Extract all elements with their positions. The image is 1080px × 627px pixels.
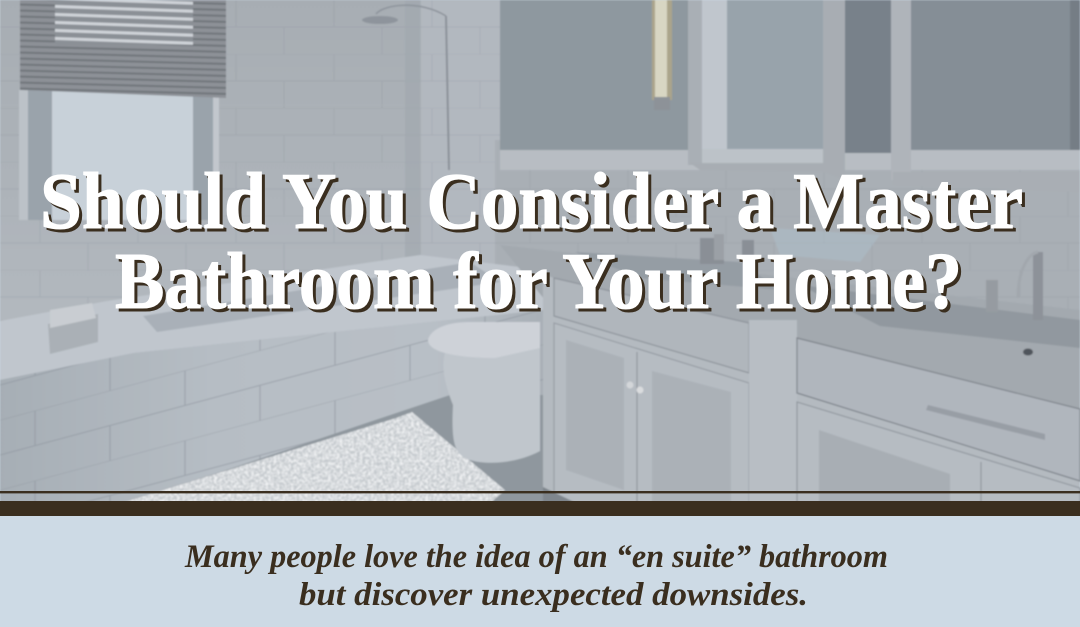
title (40, 158, 1026, 329)
roller blinds (20, 0, 226, 98)
towel basket (48, 303, 98, 354)
title text: Bathroom for Your Home? (115, 238, 962, 326)
subtitle text (184, 539, 888, 613)
wall sconce (652, 0, 672, 110)
basin plug (1023, 348, 1033, 356)
subtitle panel (0, 516, 1080, 627)
tub side bricks (0, 310, 545, 517)
back wall tiles (0, 0, 420, 320)
mirrors (500, 0, 1080, 192)
title text (40, 158, 1023, 326)
subtitle text: but discover unexpected downsides. (299, 577, 808, 613)
title text: Should You Consider a Master (40, 158, 1023, 246)
title shadow: Bathroom for Your Home? (118, 241, 965, 329)
bath tub ledge (0, 255, 545, 380)
shower head and riser (362, 5, 449, 170)
title shadow: Should You Consider a Master (43, 161, 1026, 249)
vanity countertop (500, 245, 1080, 420)
taps (700, 234, 1043, 320)
bath mat (76, 412, 505, 517)
vanity cabinet (543, 275, 1080, 517)
side wall with shower (405, 0, 545, 300)
upper wall right (495, 140, 1080, 320)
toilet (428, 322, 540, 463)
window glass (52, 90, 193, 220)
floor (86, 395, 610, 517)
subtitle text: Many people love the idea of an “en suite” bathroom (184, 539, 888, 575)
window frame (19, 90, 219, 220)
double rule band (0, 491, 1080, 516)
floor under vanity (543, 487, 605, 517)
title shadow (43, 161, 1026, 329)
